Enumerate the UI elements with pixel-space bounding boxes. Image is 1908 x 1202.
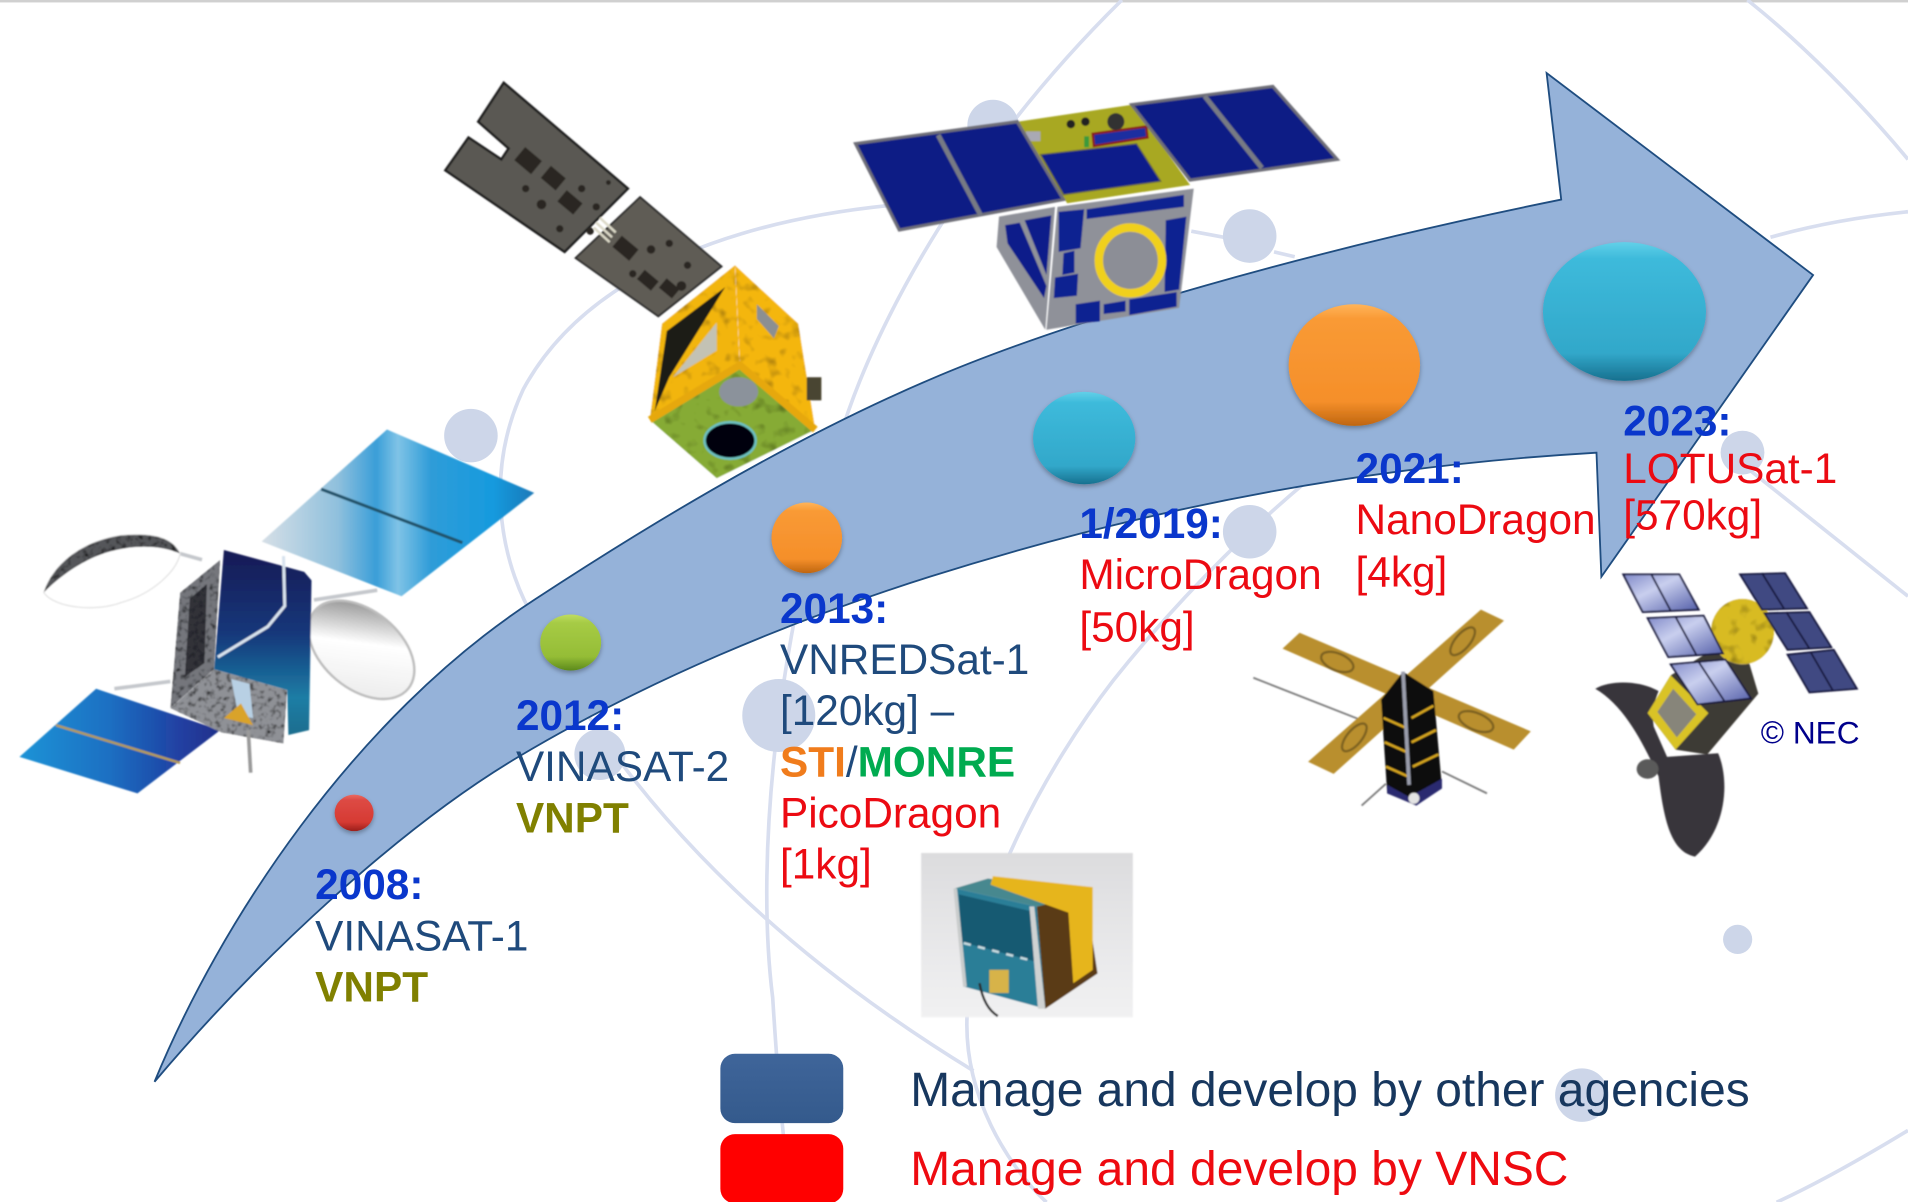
label: 2013 VNREDSat-1 and PicoDragon: PicoDragon [780, 789, 1001, 836]
milestone marker: 2023 [1543, 242, 1706, 381]
solar panel 2 [576, 197, 722, 316]
foil side [170, 560, 220, 708]
cubesat body [1381, 672, 1442, 806]
label: 2021 NanoDragon: NanoDragon [1356, 496, 1596, 543]
label: 2008 VINASAT-1: VNPT [315, 963, 428, 1010]
box front [1046, 189, 1194, 330]
label: 2012 VINASAT-2 [516, 692, 729, 841]
legend text: VNSC: Manage and develop by VNSC [910, 1143, 1568, 1196]
label: 2021 NanoDragon [1356, 445, 1596, 596]
satellite: LOTUSat-1 [1595, 573, 1857, 857]
label: 2023 LOTUSat-1: 2023: [1623, 398, 1732, 445]
box side [997, 207, 1055, 330]
label: 2012 VINASAT-2: 2012: [516, 692, 624, 739]
satellite: VNREDSat-1 [445, 83, 821, 478]
photo: PicoDragon [921, 853, 1133, 1017]
bus [1648, 633, 1758, 754]
satellite: VINASAT [19, 430, 534, 793]
bus right gold face [735, 265, 815, 430]
label: 2008 VINASAT-1 [315, 861, 528, 1010]
label: 2012 VINASAT-2: VINASAT-2 [516, 743, 729, 790]
label: 2021 NanoDragon: [4kg] [1356, 549, 1447, 596]
antennas [1253, 678, 1487, 806]
label: 2013 VNREDSat-1 and PicoDragon: VNREDSat-1 [780, 636, 1029, 683]
gold instrument [1711, 599, 1774, 664]
milestone marker: 2012 [540, 615, 601, 670]
foil bottom [170, 669, 287, 743]
label: 2008 VINASAT-1: VINASAT-1 [315, 912, 528, 959]
yellow bands [991, 876, 1093, 983]
label: 2023 LOTUSat-1 [1623, 398, 1837, 538]
legend swatch: VNSC [720, 1134, 843, 1202]
sensor lens [705, 422, 756, 459]
solar wing left [855, 122, 1064, 230]
bus underside [650, 365, 815, 478]
label: 2013 VNREDSat-1 and PicoDragon: 2013: [780, 585, 888, 632]
satellite: NanoDragon [1253, 610, 1531, 806]
dish right [290, 581, 433, 719]
label: 2008 VINASAT-1: 2008: [315, 861, 423, 908]
label: 1/2019 MicroDragon: 1/2019: [1079, 500, 1223, 547]
hinge [594, 218, 616, 242]
docking ring [1099, 228, 1162, 293]
milestone marker: 2013 [771, 503, 842, 573]
label: 2013 VNREDSat-1 and PicoDragon: [1kg] [780, 841, 872, 888]
milestone marker: 2019 [1033, 392, 1135, 484]
dish left [44, 535, 180, 608]
cube front [955, 888, 1045, 1009]
body panel [214, 550, 312, 735]
milestone marker: 2008 [335, 795, 374, 831]
solar array left [1623, 574, 1751, 705]
solar wing right [1132, 86, 1337, 180]
label: 2013 VNREDSat-1 and PicoDragon [780, 585, 1029, 888]
top deck [1017, 105, 1190, 203]
label: 2013 VNREDSat-1 and PicoDragon: [120kg] – [780, 687, 955, 734]
milestone marker: 2021 [1289, 304, 1420, 426]
satellite: MicroDragon [855, 86, 1337, 330]
front blue patches [1054, 195, 1186, 324]
legend text: other agencies: Manage and develop by other agencies [910, 1064, 1750, 1117]
legend swatch: other agencies [720, 1054, 843, 1123]
bus left gold face [650, 265, 740, 420]
label: 1/2019 MicroDragon: MicroDragon [1079, 551, 1322, 598]
legend [720, 1054, 1750, 1202]
solar panel upper [262, 430, 534, 596]
solar panel lower [19, 689, 220, 793]
solar array right [1740, 573, 1857, 692]
solar arms [1283, 633, 1531, 750]
label: 1/2019 MicroDragon: [50kg] [1079, 603, 1195, 650]
label: 2023 LOTUSat-1: [570kg] [1623, 491, 1762, 538]
caption: NEC credit: © NEC [1761, 714, 1860, 750]
timeline arrow [155, 73, 1813, 1082]
struts [114, 554, 377, 689]
label: 2023 LOTUSat-1: LOTUSat-1 [1623, 445, 1837, 492]
radar antenna [1595, 683, 1724, 857]
label: 1/2019 MicroDragon [1079, 500, 1322, 650]
label: 2013 VNREDSat-1 and PicoDragon: STI/MONRE [780, 738, 1015, 785]
label: 2012 VINASAT-2: VNPT [516, 794, 629, 841]
label: 2021 NanoDragon: 2021: [1356, 445, 1464, 492]
solar panel 1 [445, 83, 628, 252]
